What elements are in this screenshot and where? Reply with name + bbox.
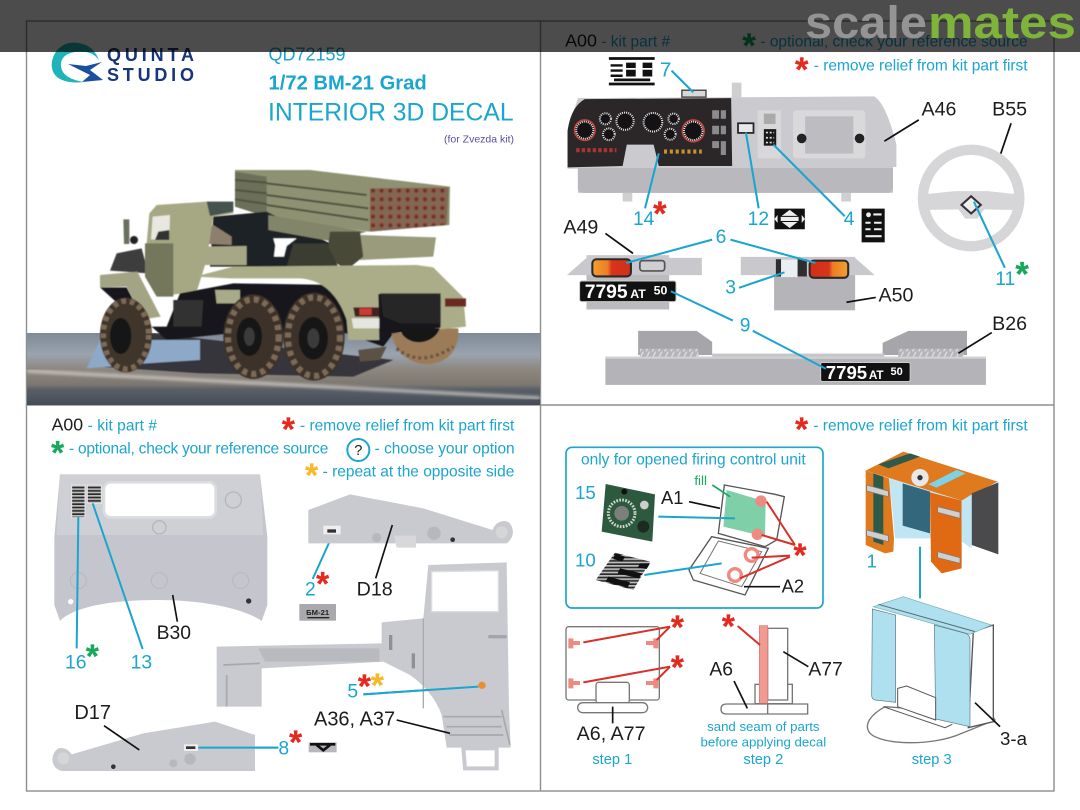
legend: * [51,435,64,472]
straps [867,485,960,563]
label 9: 9 [740,316,750,337]
lower dashboard parts [563,195,1029,385]
leaders [645,71,845,216]
panel: cab parts [51,412,515,771]
label 3: 3 [725,278,736,299]
front light blue strip [889,478,962,538]
title text: QD72159 [268,44,346,64]
step 1: * [671,609,684,646]
legend: ? [354,443,362,459]
label 5 [347,668,384,705]
leaders [77,503,478,748]
step 2 [700,609,843,768]
step 3 assembled decal: step 3 [912,752,952,768]
part B26 [605,331,986,385]
left face [866,471,894,553]
label D17: D17 [74,702,111,724]
legend: * [795,412,808,449]
label 8: 8 [278,738,289,759]
label A36, A37: A36, A37 [314,709,395,731]
leaders lower [626,240,826,369]
label A50: A50 [878,285,913,307]
license plate on B26 [821,362,910,383]
rocket pod [235,170,450,232]
part A49 [567,255,702,310]
legend top right [565,27,1028,246]
kit part legend: A00 [565,30,597,50]
ground shadow [100,333,393,377]
part D17 [52,722,255,771]
logo: Quinta Studio [52,43,194,85]
step 3 assembled decal: 3-a [1000,728,1028,749]
part A50 [741,257,875,310]
decal 15 [602,484,655,542]
label 2: 2 [305,580,316,601]
kit part legend: - kit part # [601,33,671,50]
icon: swirl [52,43,103,82]
part A1 lid [718,485,784,547]
label 4 [844,209,885,242]
legend: A00 [52,414,83,434]
step 1: * [671,649,684,686]
label B55: B55 [992,99,1027,121]
label A49: A49 [563,217,598,239]
panel: title and truck photo [27,43,540,405]
decal 16 on part [72,485,85,518]
label 5: 5 [347,681,358,702]
label 5: * [358,668,371,705]
legend [51,412,515,495]
chassis [100,283,450,347]
switch frame with decal 4 [758,110,781,158]
license plate on B26: AT [869,369,884,382]
part B30 [54,474,267,621]
label 14: 14 [633,209,655,230]
decal 13 on part [87,485,101,503]
panel: dashboard parts [563,27,1029,385]
label 11: 11 [995,269,1015,290]
label 14 [633,195,667,233]
label 1: 1 [867,551,877,572]
fill label [694,473,730,497]
dashboard A46 [568,83,896,201]
label 16: * [86,639,99,676]
label B30: B30 [157,623,191,644]
license plate: 7795 [585,282,628,303]
label 13: 13 [131,652,152,673]
hatch frame [793,110,865,158]
road line [27,371,540,398]
dark back side [972,482,998,554]
label B26: B26 [992,313,1027,335]
stand [867,707,995,743]
step 1 [566,609,684,768]
light ground patch [87,340,200,368]
top strip [873,597,992,634]
step 2: before applying decal [700,734,826,749]
label 11 [995,255,1029,293]
label 12: 12 [748,209,769,230]
legend: - choose your option [375,440,515,457]
title text: INTERIOR 3D DECAL [268,100,514,126]
step 2: sand seam of parts [707,719,820,734]
front fender [100,272,161,319]
star: * [794,538,807,575]
label 10: 10 [575,550,596,571]
legend: - repeat at the opposite side [323,463,514,480]
label 16 [65,639,99,676]
callout heading: only for opened firing control unit [581,451,806,468]
license plate on B26: 50 [891,366,903,378]
part A2 base [689,537,768,595]
icon: decal 7 [609,57,655,85]
top face [866,452,998,501]
kit part legend [565,30,671,50]
step 1: A6, A77 [577,723,646,745]
step 2: * [722,609,735,646]
part A36, A37 door [217,562,511,768]
step 2: A6 [709,660,733,681]
label D18: D18 [357,579,393,601]
cab [110,202,233,297]
legend: - remove relief from kit part first [813,417,1028,434]
leader 1 to 3-a [917,547,923,598]
wordmark: STUDIO [107,65,194,85]
step 3 assembled decal [867,547,1028,768]
decal 10 [596,553,650,590]
instrument panel [568,98,732,167]
step 2: step 2 [743,752,783,768]
legend: - kit part # [88,417,157,434]
label 11: * [1015,255,1029,293]
launcher cradle [195,212,436,270]
leaders [644,517,735,575]
black leaders lower [605,233,992,353]
decal BM-21 plate: БМ-21 [306,608,330,617]
remove relief legend [795,51,1028,89]
remove relief legend: * [795,51,809,89]
license plate: AT [630,287,646,301]
box back [968,625,993,728]
remove relief legend: - remove relief from kit part first [814,58,1028,75]
label A2: A2 [782,575,804,596]
wordmark [107,45,194,85]
legend: * [282,412,295,449]
legend: - remove relief from kit part first [300,417,515,434]
license plate [580,281,676,303]
label 12 [748,209,805,230]
optional legend: - optional, check your reference source [760,33,1028,50]
rear wheel [392,328,458,364]
part D18 [308,494,513,548]
label 2 [305,566,329,603]
steering wheel [922,150,1021,246]
step 2: A77 [808,660,843,681]
fill label: fill [694,473,707,488]
wheels [100,293,387,381]
watermark: scalemates [805,0,1076,48]
legend [795,412,1028,449]
label 7: 7 [660,58,671,81]
label 5: * [371,668,384,705]
road [27,333,540,405]
license plate on B26: 7795 [826,362,867,383]
photo: BM-21 Grad truck [87,170,466,381]
decal 7 on part [682,90,706,97]
blue band right [934,625,970,727]
title text: (for Zvezda kit) [444,134,514,146]
blue band left [872,609,896,702]
label 16: 16 [65,652,86,673]
black leaders [884,120,1011,157]
cargo body [195,265,466,340]
header overlay band [0,0,1080,52]
label 14: * [653,195,667,233]
stand block [898,686,936,720]
optional legend: * [742,27,756,65]
decal 8 [309,742,337,752]
label A1: A1 [661,487,683,508]
right orange leg [930,492,962,573]
title text [268,44,514,146]
license plate: 50 [654,283,668,297]
front center [896,615,934,702]
decal BM-21 plate [299,604,336,621]
legend: * [305,458,318,495]
legend: - optional, check your reference source [69,440,328,457]
optional legend [742,27,1028,65]
label 6: 6 [716,227,726,248]
panel: firing control unit [566,412,1028,768]
label 15: 15 [575,482,596,503]
callout box [566,447,823,608]
title text: 1/72 BM-21 Grad [268,72,427,94]
step 1: step 1 [592,752,632,768]
label 4: 4 [844,209,855,230]
label 8 [278,725,302,762]
decal 12 on part [738,123,753,133]
label A46: A46 [922,99,957,121]
label 8: * [289,725,302,762]
wordmark: QUINTA [107,45,194,65]
label 2: * [316,566,329,603]
decal part 1 box [866,452,998,573]
